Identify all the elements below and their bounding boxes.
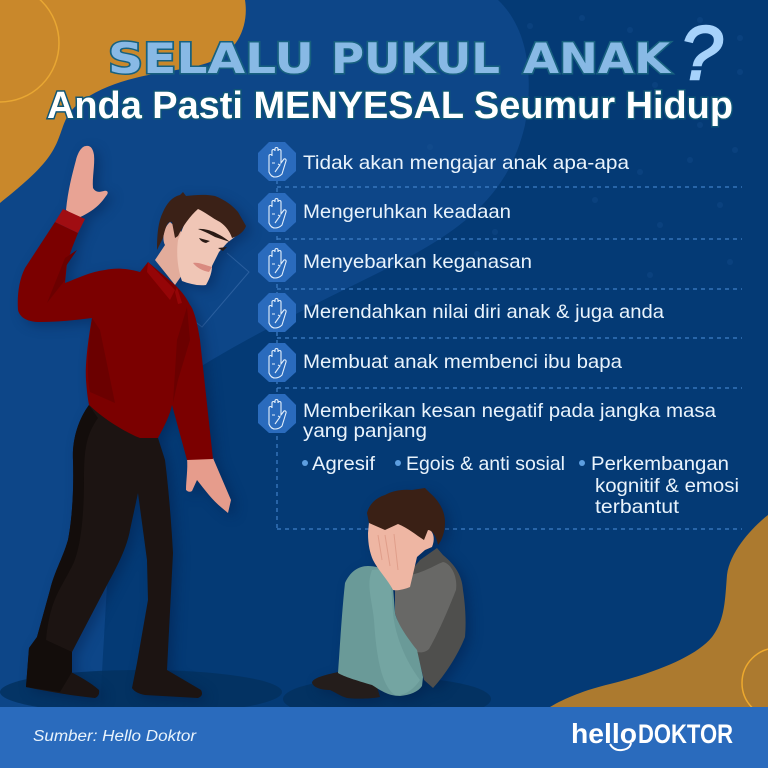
footer bar — [0, 707, 768, 768]
man: collar right — [175, 287, 182, 304]
title word: anak: ANAK — [523, 34, 672, 83]
dashed connector lines — [277, 180, 742, 529]
item 6: icon, text and sub-points — [258, 394, 739, 518]
text: Merendahkan nilai diri anak & juga anda — [303, 301, 664, 323]
sub-point: egois: Egois & anti sosial — [406, 453, 565, 475]
text: Membuat anak membenci ibu bapa — [303, 351, 622, 373]
icon: hand in octagon — [258, 394, 296, 433]
logo: stethoscope curve — [610, 743, 631, 750]
icon: hand in octagon — [258, 293, 296, 332]
decorative diamond outline — [180, 253, 249, 327]
man: trousers shade — [26, 405, 98, 692]
man: collar — [147, 262, 175, 300]
icon: hand in octagon — [258, 142, 296, 181]
source text: Sumber: Hello Doktor — [33, 728, 197, 745]
bullet dots — [302, 460, 585, 466]
title line 1 — [108, 34, 672, 83]
text line 1: Memberikan kesan negatif pada jangka masa — [303, 400, 716, 422]
man — [18, 146, 246, 698]
child: hair — [367, 488, 445, 545]
logo — [571, 718, 733, 750]
dot pattern — [427, 15, 743, 313]
icon: hand in octagon — [258, 343, 296, 382]
icon: hand in octagon — [258, 243, 296, 282]
title question mark: ? — [680, 11, 723, 96]
item 2: icon and text — [258, 193, 511, 232]
child: arm — [395, 562, 456, 652]
ground shadow under child — [283, 678, 491, 707]
item 4: icon and text — [258, 293, 664, 332]
child — [312, 488, 466, 699]
item 1: icon and text — [258, 142, 629, 181]
child: hoodie — [395, 548, 466, 688]
sub-point: terbantut: terbantut — [595, 496, 680, 518]
child: ear and hands — [368, 522, 434, 590]
child: fingers — [378, 534, 398, 570]
ground shadow under man — [0, 670, 282, 707]
text line 2: yang panjang — [303, 420, 427, 442]
man: neck and ear — [155, 222, 185, 285]
child: trousers highlight — [369, 570, 420, 695]
item 3: icon and text — [258, 243, 532, 282]
man: shirt — [18, 222, 213, 460]
icon: hand in octagon — [258, 193, 296, 232]
man: raised hand — [66, 146, 108, 218]
title word: pukul: PUKUL — [331, 34, 500, 83]
item 5: icon and text — [258, 343, 622, 382]
man: trousers — [26, 405, 202, 698]
text: Menyebarkan keganasan — [303, 251, 532, 273]
man: sleeve and body folds — [47, 250, 190, 403]
lighter background blob — [0, 0, 529, 707]
logo: hello: hello — [571, 718, 637, 749]
title word: selalu: SELALU — [108, 34, 314, 83]
title line 2: Anda Pasti MENYESAL Seumur Hidup — [47, 85, 733, 127]
man: hair — [157, 192, 246, 250]
orange ring bottom right — [741, 648, 768, 707]
sub-point: agresif: Agresif — [312, 453, 376, 475]
sub-point: kognitif: kognitif & emosi — [595, 475, 739, 497]
child: shoes — [312, 672, 380, 699]
logo: doktor: DOKTOR — [638, 719, 733, 749]
man: eyebrows and eyes — [198, 229, 230, 251]
orange blob bottom right — [550, 515, 768, 707]
orange ring top left — [0, 0, 59, 102]
text: Tidak akan mengajar anak apa-apa — [303, 152, 629, 174]
man: face — [177, 205, 236, 285]
man: mouth — [193, 263, 212, 272]
child: trousers — [338, 566, 423, 696]
sub-point: perkembangan: Perkembangan — [591, 453, 729, 475]
man: lowered hand — [186, 458, 231, 513]
text: Mengeruhkan keadaan — [303, 201, 511, 223]
orange blob top left — [0, 0, 246, 203]
man: cuff — [55, 209, 85, 233]
